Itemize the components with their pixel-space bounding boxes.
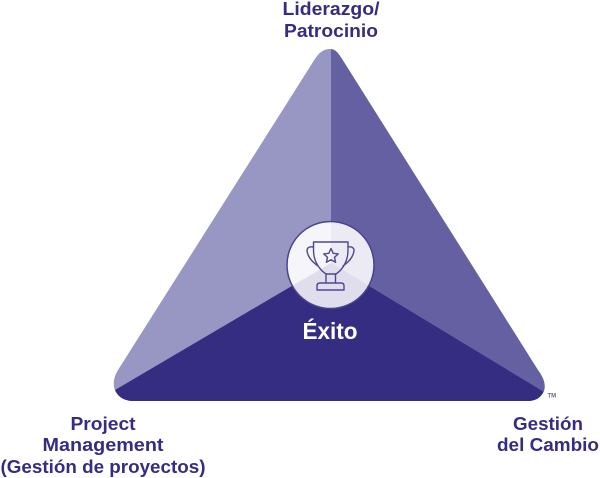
circle bottom segment	[293, 263, 368, 308]
triangle diagram	[114, 49, 545, 401]
circle top-left segment	[288, 222, 374, 308]
segment: Gestión del Cambio right	[331, 49, 545, 401]
circle top-right segment	[331, 222, 374, 285]
label: Gestión del Cambio: del Cambio	[497, 434, 599, 455]
label: Project Management: Management	[42, 434, 164, 455]
central circle badge	[286, 220, 375, 310]
segment: Liderazgo/Patrocinio left	[114, 49, 331, 401]
label: Liderazgo/Patrocinio: Patrocinio	[284, 20, 378, 41]
trademark mark: TM	[548, 394, 556, 400]
segment: Project Management bottom	[115, 286, 544, 401]
circle outline	[287, 222, 374, 308]
icon: trophy with star	[307, 242, 354, 290]
label: Project Management	[0, 413, 206, 477]
center label: Éxito: Éxito	[302, 317, 358, 344]
label: Liderazgo/Patrocinio	[282, 0, 380, 41]
label: Gestión del Cambio: Gestión	[513, 413, 583, 434]
label: Gestión del Cambio	[497, 413, 599, 455]
label: Project Management: (Gestión de proyectos)	[0, 456, 206, 477]
label: Project Management: Project	[70, 413, 136, 434]
